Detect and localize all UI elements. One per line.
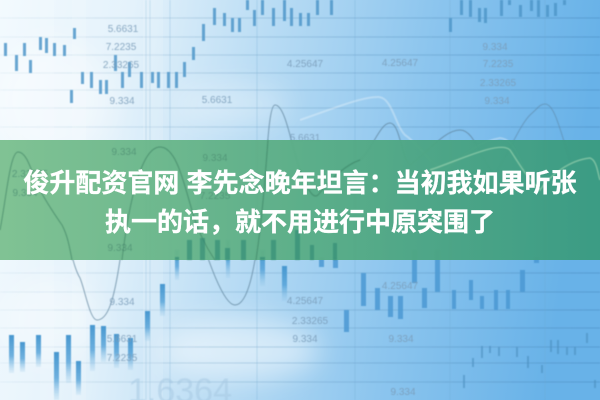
axis number labels: 9.334 [390,387,416,398]
axis number labels: 2.33265 [480,78,517,89]
line chart: dark curve [0,97,600,320]
axis number labels: 2.33265 [103,60,140,71]
banner ghost labels: 9.334 [111,147,137,158]
banner ghost curve [0,140,600,260]
title: 执一的话，就不用进行中原突围了 [105,207,495,237]
banner ghost labels: 9.334 [107,243,133,254]
bar series: blue columns, lower middle [319,250,539,332]
banner ghost labels: 9.334 [12,188,38,199]
bar series: blue candlesticks, top [4,0,566,103]
bar series: blue columns, lower left fading [9,240,287,400]
green banner [0,140,600,260]
axis number labels: 9.334 [109,297,135,308]
line chart: light curve [300,97,600,190]
axis number labels: 5.6631 [290,133,321,144]
axis number labels: 9.334 [109,96,135,107]
banner ghost labels [12,147,231,254]
axis number labels: 7.2235 [106,42,137,53]
axis number labels: 4.25647 [382,281,419,292]
title [23,168,577,237]
axis number labels: 4.25647 [287,59,324,70]
axis number labels: 4.25647 [382,58,419,69]
axis number labels: 5.6631 [108,24,139,35]
axis number labels: 5.6631 [107,334,138,345]
axis number labels: 7.2235 [107,353,138,364]
title: 俊升配资官网 李先念晚年坦言：当初我如果听张 [23,168,577,198]
axis number labels [103,24,517,398]
axis number labels: 9.334 [482,42,508,53]
axis number labels: 9.334 [484,96,510,107]
axis number labels: 7.2235 [483,59,514,70]
small bars: lower right [463,333,596,388]
banner ghost labels: 2.33265 [12,169,49,180]
banner ghost labels: 7.2235 [200,191,231,202]
axis number labels: 9.334 [388,334,414,345]
banner ghost labels: 9.334 [202,153,228,164]
axis number labels: 4.25647 [287,296,324,307]
axis number labels: 9.334 [292,334,318,345]
banner ghost bars [175,230,337,260]
axis number labels: 2.33265 [292,316,329,327]
axis number labels: 5.6631 [202,95,233,106]
